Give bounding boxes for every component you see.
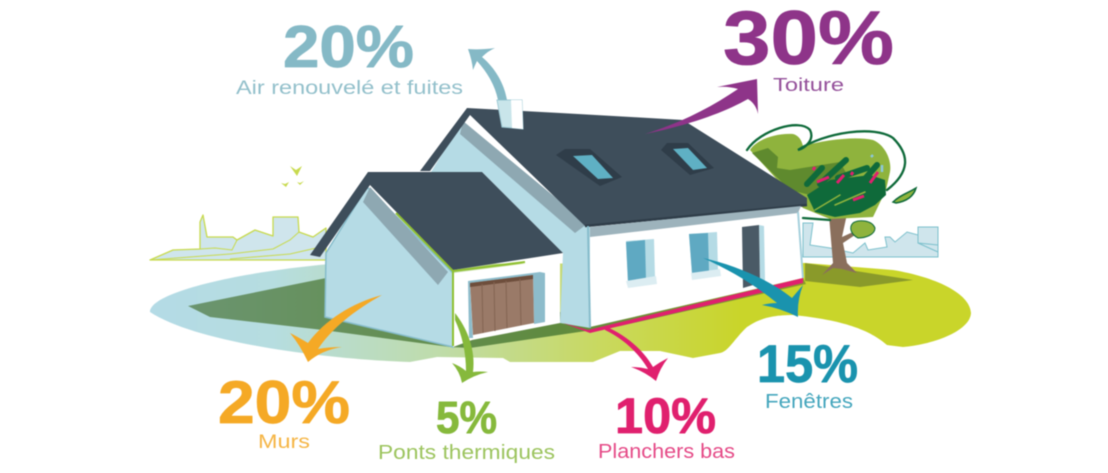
label: air 20%	[236, 14, 463, 99]
small bush	[851, 221, 875, 238]
arrow: air	[468, 48, 507, 100]
crown	[750, 134, 890, 219]
label: ponts thermiques 5%: 5%	[436, 392, 497, 443]
arrow: planchers	[605, 326, 668, 381]
label: fenetres 15%: 15%	[757, 335, 858, 394]
garage grey strip	[363, 187, 448, 285]
label: air 20%: Air renouvelé et fuites	[236, 78, 463, 99]
main roof	[420, 108, 807, 226]
garage gable wall	[325, 187, 453, 347]
label: toiture 30%: Toiture	[773, 75, 844, 95]
pink floor line	[563, 278, 803, 333]
trunk	[822, 214, 857, 275]
main front wall	[590, 212, 803, 327]
label: murs 20%: 20%	[218, 369, 350, 436]
crown outline	[747, 125, 905, 220]
house	[310, 100, 807, 347]
blossoms	[813, 167, 878, 200]
door	[742, 225, 765, 288]
window right	[689, 232, 721, 280]
label: air 20%: 20%	[283, 14, 414, 80]
label: planchers bas 10%: Planchers bas	[598, 441, 735, 463]
skyline: right town	[803, 223, 938, 257]
eave strip	[590, 206, 801, 237]
falling leaf	[893, 188, 916, 203]
foliage strokes	[807, 160, 886, 217]
icon: birds	[281, 166, 304, 187]
ground	[150, 263, 971, 362]
ground shadow	[188, 278, 806, 348]
arrow: ponts	[452, 313, 488, 383]
main gable wall	[431, 125, 590, 328]
arrow: murs	[290, 295, 382, 362]
chimney	[497, 100, 523, 129]
arrow: toiture	[645, 79, 758, 134]
label: ponts thermiques 5%: Ponts thermiques	[378, 441, 555, 464]
label: murs 20%: Murs	[258, 432, 310, 453]
crown shade	[752, 148, 850, 195]
skylight right	[661, 143, 714, 175]
garage door	[468, 272, 545, 338]
tree shadow	[805, 263, 913, 287]
skylight left	[556, 149, 622, 186]
window left	[626, 239, 657, 288]
label: fenetres 15%: Fenêtres	[765, 391, 853, 413]
gable grey strip	[460, 121, 587, 233]
garage roof	[310, 172, 563, 270]
arrow: fenetres	[703, 258, 803, 317]
skyline: left town	[150, 215, 326, 260]
label: ponts thermiques 5%	[378, 392, 555, 464]
garage front	[453, 259, 560, 347]
label: planchers bas 10%	[598, 388, 735, 463]
tree	[747, 125, 916, 275]
label: planchers bas 10%: 10%	[615, 388, 716, 444]
